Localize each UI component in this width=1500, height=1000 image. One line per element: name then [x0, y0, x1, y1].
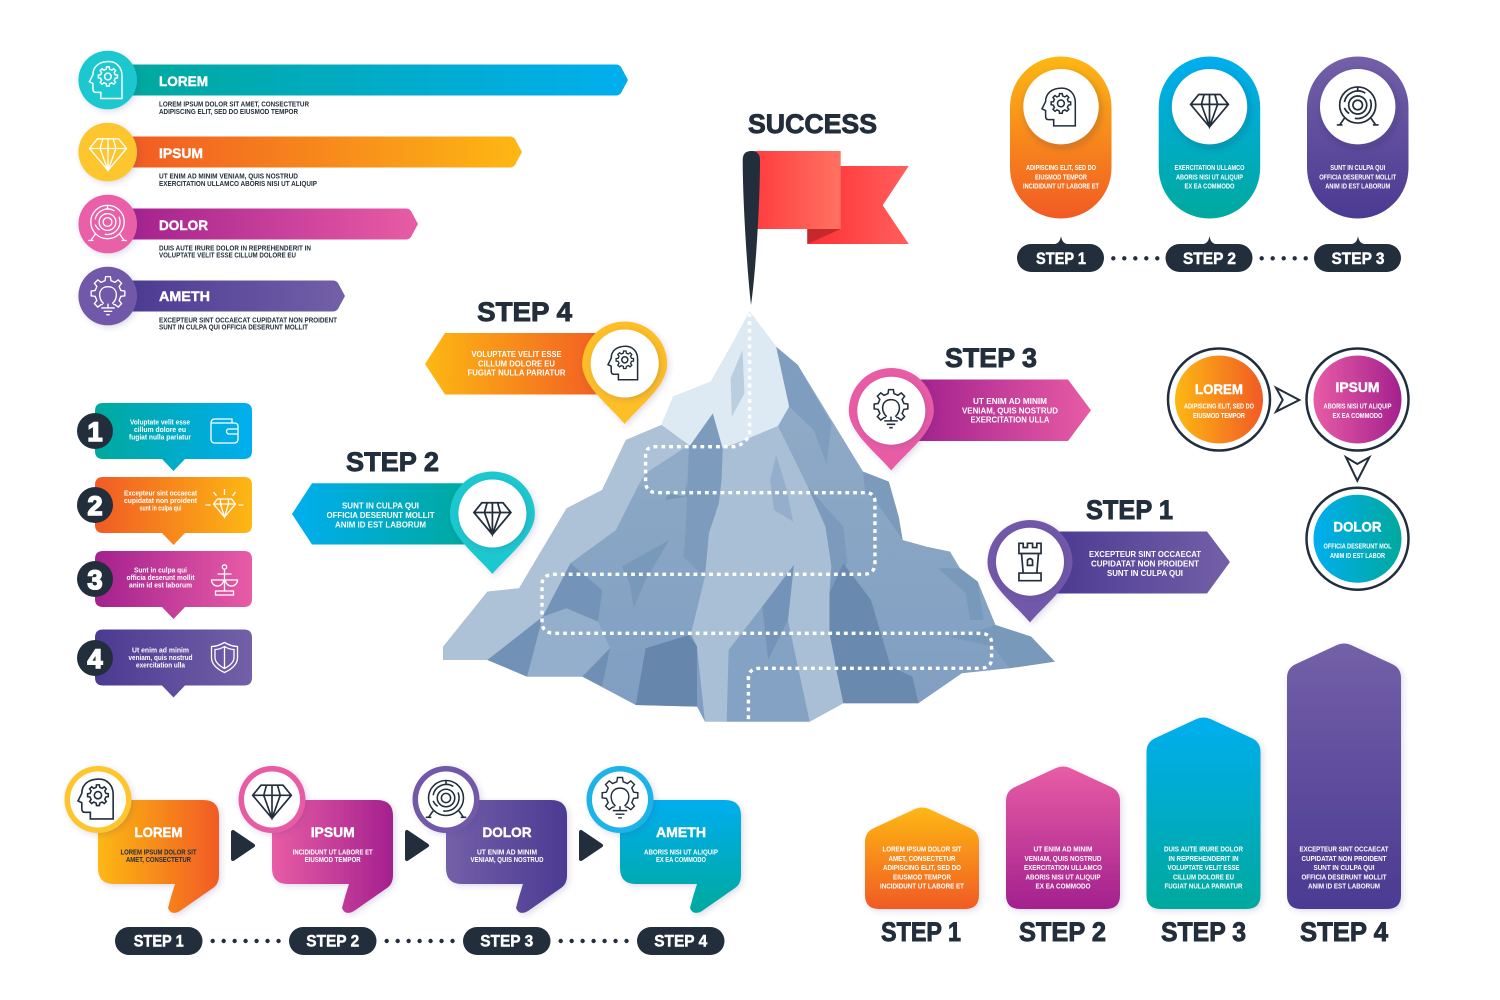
step pills with dotted connectors: STEP 3 — [480, 932, 533, 950]
numbered box 1: Voluptate velit esse — [130, 420, 190, 426]
step pills with notches and dots — [1017, 236, 1401, 272]
bar: step 4: OFFICIA DESERUNT MOLLIT — [1302, 874, 1387, 881]
option bar: ameth — [78, 267, 345, 332]
bar: step 2: UT ENIM AD MINIM — [1034, 846, 1093, 854]
option bar: lorem: LOREM IPSUM DOLOR SIT AMET, CONSECTETUR — [159, 102, 309, 109]
numbered box 4: veniam, quis nostrud — [128, 655, 192, 662]
mountain dashed trail — [542, 313, 992, 722]
callout: mountain step 3: VENIAM, QUIS NOSTRUD — [962, 406, 1058, 415]
callout: mountain step 2: OFFICIA DESERUNT MOLLIT — [326, 511, 435, 520]
icon: flag — [743, 151, 909, 305]
step pills with dotted connectors: STEP 2 — [306, 932, 359, 950]
numbered box 2: Excepteur sint occaecat — [124, 491, 198, 498]
option bar: dolor — [78, 195, 418, 260]
callout: mountain step 3: EXERCITATION ULLA — [970, 416, 1050, 425]
callout: mountain step 3: STEP 3 — [945, 343, 1037, 373]
numbered box 4: Ut enim ad minim — [132, 648, 189, 654]
bar: step 3: CILLUM DOLORE EU — [1173, 874, 1234, 881]
bar: step 4 — [1287, 644, 1401, 947]
callout: mountain step 4 — [425, 297, 667, 424]
bar: step 3: STEP 3 — [1161, 917, 1246, 947]
speech bubble: ameth — [586, 766, 741, 913]
numbered box 2: 2 — [87, 491, 103, 521]
capsule: step 2: ABORIS NISI UT ALIQUIP — [1176, 174, 1243, 181]
panel: top-left option bars — [78, 51, 628, 332]
speech bubble: ameth: EX EA COMMODO — [656, 857, 706, 864]
circle: lorem: EIUSMOD TEMPOR — [1193, 413, 1245, 420]
speech bubble: dolor: DOLOR — [482, 824, 532, 840]
capsule: step 1: INCIDIDUNT UT LABORE ET — [1023, 184, 1100, 190]
speech bubble: dolor: UT ENIM AD MINIM — [477, 850, 537, 856]
numbered box 2: sunt in culpa qui — [140, 506, 182, 512]
bar: step 4: STEP 4 — [1300, 917, 1388, 947]
callout: mountain step 2: ANIM ID EST LABORUM — [335, 520, 426, 529]
callout: mountain step 3: UT ENIM AD MINIM — [973, 397, 1047, 406]
panel: top-right capsule steps — [1010, 56, 1408, 272]
capsule: step 3: SUNT IN CULPA QUI — [1330, 165, 1385, 172]
bar: step 2: EXERCITATION ULLAMCO — [1024, 865, 1102, 872]
panel: circular flow — [1168, 348, 1408, 590]
option bar: ameth: SUNT IN CULPA QUI OFFICIA DESERUNT MOLLIT — [159, 325, 309, 332]
option bar: ameth: AMETH — [159, 288, 210, 304]
bar: step 3 — [1146, 718, 1260, 947]
capsule: step 3: OFFICIA DESERUNT MOLLIT — [1319, 174, 1397, 181]
callout: mountain step 2 — [292, 447, 535, 574]
numbered box 2 — [77, 477, 252, 545]
callout: mountain step 4: STEP 4 — [477, 297, 572, 327]
numbered box 3: officia deserunt mollit — [126, 575, 195, 582]
numbered box 3 — [77, 551, 252, 619]
numbered box 4: exercitation ulla — [136, 662, 185, 670]
arrows between speech bubbles — [233, 832, 601, 859]
callout: mountain step 4: CILLUM DOLORE EU — [478, 359, 555, 368]
bar: step 4: CUPIDATAT NON PROIDENT — [1302, 856, 1387, 863]
title: success: SUCCESS — [748, 109, 877, 139]
bar: step 1: INCIDIDUNT UT LABORE ET — [880, 884, 965, 890]
bar: step 4: EXCEPTEUR SINT OCCAECAT — [1300, 846, 1389, 854]
bar: step 1: STEP 1 — [881, 917, 961, 947]
callout: mountain step 1: EXCEPTEUR SINT OCCAECAT — [1089, 550, 1201, 559]
bar: step 1: EIUSMOD TEMPOR — [893, 874, 951, 881]
capsule: step 1: EIUSMOD TEMPOR — [1035, 174, 1087, 181]
chart: stepped house bars — [865, 644, 1401, 947]
capsule: step 2 — [1159, 56, 1260, 218]
numbered box 1: 1 — [87, 417, 103, 447]
circle: dolor: DOLOR — [1334, 518, 1382, 534]
speech bubble: lorem: LOREM IPSUM DOLOR SIT — [120, 850, 197, 856]
numbered box 1 — [77, 403, 252, 471]
option bar: lorem: LOREM — [159, 73, 208, 89]
option bar: ipsum: IPSUM — [159, 145, 203, 161]
callout: mountain step 1: STEP 1 — [1086, 495, 1173, 525]
bar: step 1: AMET, CONSECTETUR — [888, 856, 956, 863]
option bar: lorem — [78, 51, 628, 116]
option bar: lorem: ADIPISCING ELIT, SED DO EIUSMOD TEMPOR — [159, 109, 298, 116]
arrow: ipsum to dolor — [1346, 457, 1369, 481]
callout: mountain step 1: SUNT IN CULPA QUI — [1107, 569, 1183, 578]
circle: ipsum: ABORIS NISI UT ALIQUIP — [1324, 404, 1392, 411]
numbered box 2: cupidatat non proident — [124, 498, 198, 505]
option bar: ipsum — [78, 123, 522, 188]
circle: dolor — [1306, 488, 1408, 590]
step pills with notches and dots: STEP 2 — [1183, 250, 1236, 268]
numbered box 3: anim id est laborum — [129, 582, 192, 590]
step pills with notches and dots: STEP 3 — [1332, 250, 1384, 268]
capsule: step 2: EXERCITATION ULLAMCO — [1174, 165, 1245, 172]
panel: numbered callout boxes — [77, 403, 252, 698]
numbered box 4 — [77, 630, 252, 698]
circle: ipsum: IPSUM — [1336, 379, 1380, 395]
bar: step 2: VENIAM, QUIS NOSTRUD — [1024, 856, 1102, 863]
capsule: step 3: ANIM ID EST LABORUM — [1325, 184, 1390, 190]
bar: step 2 — [1006, 766, 1120, 947]
bar: step 4: SUNT IN CULPA QUI — [1314, 865, 1375, 872]
numbered box 1: cillum dolore eu — [134, 427, 186, 434]
step pills with dotted connectors: STEP 4 — [654, 932, 708, 950]
option bar: ipsum: UT ENIM AD MINIM VENIAM, QUIS NOSTRUD — [159, 173, 298, 180]
circle: ipsum — [1306, 348, 1408, 450]
bar: step 3: VOLUPTATE VELIT ESSE — [1168, 865, 1240, 872]
arrow: lorem to ipsum — [1276, 388, 1299, 412]
bar: step 2: STEP 2 — [1019, 917, 1106, 947]
option bar: dolor: DUIS AUTE IRURE DOLOR IN REPREHENDERIT IN — [159, 245, 311, 252]
speech bubble: dolor: VENIAM, QUIS NOSTRUD — [470, 857, 544, 864]
bar: step 1 — [865, 808, 979, 947]
speech bubble: lorem — [64, 766, 219, 913]
bar: step 2: EX EA COMMODO — [1036, 884, 1091, 890]
illustration: mountain — [443, 312, 1055, 722]
panel: bottom-left speech bubble process — [64, 766, 741, 955]
numbered box 3: Sunt in culpa qui — [134, 568, 187, 575]
option bar: ipsum: EXERCITATION ULLAMCO ABORIS NISI UT ALIQUIP — [159, 181, 317, 188]
step pills with notches and dots: STEP 1 — [1036, 250, 1086, 268]
capsule: step 1: ADIPISCING ELIT, SED DO — [1026, 165, 1096, 172]
speech bubble: ipsum: IPSUM — [311, 824, 355, 840]
bar: step 2: ABORIS NISI UT ALIQUIP — [1026, 874, 1101, 881]
speech bubble: ipsum: INCIDIDUNT UT LABORE ET — [293, 850, 373, 856]
speech bubble: ipsum: EIUSMOD TEMPOR — [305, 857, 361, 864]
callout: mountain step 3 — [849, 343, 1091, 470]
circle: dolor: OFFICIA DESERUNT MOL — [1324, 544, 1392, 550]
callout: mountain step 4: VOLUPTATE VELIT ESSE — [472, 350, 562, 359]
speech bubble: dolor — [412, 766, 567, 913]
bar: step 1: LOREM IPSUM DOLOR SIT — [882, 846, 962, 854]
option bar: dolor: VOLUPTATE VELIT ESSE CILLUM DOLORE EU — [159, 253, 296, 260]
circle: lorem: ADIPISCING ELIT, SED DO — [1184, 404, 1254, 411]
speech bubble: ameth: ABORIS NISI UT ALIQUIP — [644, 850, 718, 856]
numbered box 4: 4 — [87, 644, 103, 674]
capsule: step 3 — [1307, 56, 1408, 218]
numbered box 1: fugiat nulla pariatur — [129, 434, 191, 442]
bar: step 3: FUGIAT NULLA PARIATUR — [1164, 884, 1242, 890]
callout: mountain step 2: STEP 2 — [346, 447, 439, 477]
circle: ipsum: EX EA COMMODO — [1332, 413, 1383, 420]
option bar: dolor: DOLOR — [159, 217, 208, 233]
step pills with dotted connectors — [115, 927, 724, 955]
bar: step 3: DUIS AUTE IRURE DOLOR — [1164, 846, 1243, 854]
numbered box 3: 3 — [87, 565, 103, 595]
step pills with dotted connectors: STEP 1 — [134, 932, 184, 950]
bar: step 3: IN REPREHENDERIT IN — [1168, 856, 1238, 863]
callout: mountain step 4: FUGIAT NULLA PARIATUR — [468, 369, 566, 378]
callout: mountain step 1: CUPIDATAT NON PROIDENT — [1091, 560, 1199, 568]
speech bubble: lorem: LOREM — [134, 824, 182, 840]
option bar: ameth: EXCEPTEUR SINT OCCAECAT CUPIDATAT NON PROIDENT — [159, 317, 338, 324]
capsule: step 2: EX EA COMMODO — [1184, 184, 1235, 190]
callout: mountain step 2: SUNT IN CULPA QUI — [342, 502, 419, 510]
speech bubble: ipsum — [238, 766, 393, 913]
speech bubble: lorem: AMET, CONSECTETUR — [126, 857, 191, 864]
bar: step 1: ADIPISCING ELIT, SED DO — [883, 865, 961, 872]
bar: step 4: ANIM ID EST LABORUM — [1308, 884, 1380, 890]
callout: mountain step 1 — [988, 495, 1230, 622]
speech bubble: ameth: AMETH — [656, 824, 706, 840]
capsule: step 1 — [1010, 56, 1112, 218]
circle: dolor: ANIM ID EST LABOR — [1330, 553, 1385, 560]
circle: lorem: LOREM — [1195, 381, 1243, 397]
circle: lorem — [1168, 348, 1270, 450]
